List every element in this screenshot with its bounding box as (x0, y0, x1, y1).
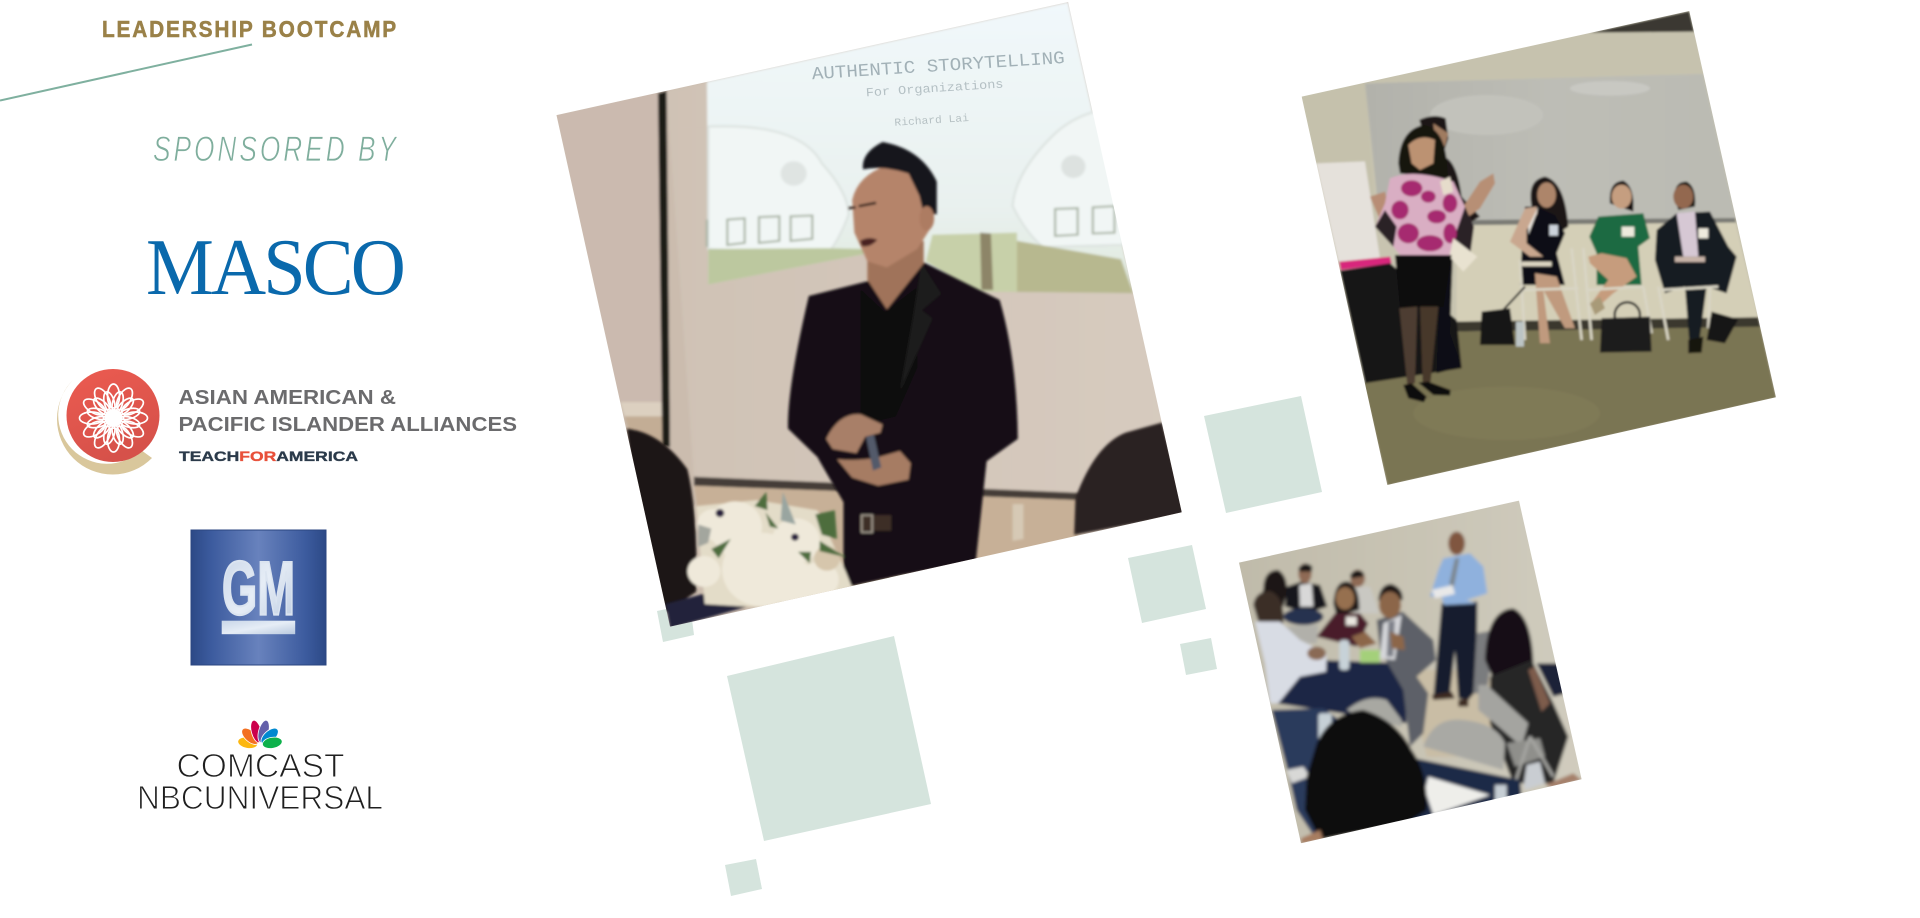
chair back front (1423, 720, 1505, 770)
logo text line 2: PACIFIC ISLANDER ALLIANCES (178, 414, 517, 436)
photo scene: room and screen (556, 2, 1182, 626)
GM letters: GM (222, 546, 295, 632)
seated woman in green (1588, 181, 1650, 315)
heading: sponsored by: SPONSORED BY (153, 130, 399, 169)
central table (1277, 660, 1407, 723)
chairs and bags (1520, 248, 1718, 340)
seated woman in black (1510, 177, 1575, 343)
projected slide subtitle: For Organizations (865, 77, 1004, 100)
standing man in blue shirt (1430, 532, 1487, 707)
icon: peacock (237, 719, 283, 750)
bouquet of white flowers (687, 492, 852, 608)
bottles and papers (1318, 713, 1332, 740)
background seated people (1257, 563, 1379, 625)
curly hair in foreground (1305, 710, 1427, 840)
accent line (0, 44, 252, 100)
icon: red circle (66, 369, 160, 462)
decorative green squares (657, 396, 1322, 896)
white chair back center (1347, 698, 1402, 727)
projected slide title: AUTHENTIC STORYTELLING (811, 48, 1065, 85)
photo scene: round tables (1239, 500, 1582, 844)
wordmark: Comcast: COMCAST (176, 747, 344, 784)
woman in maroon (1317, 582, 1368, 647)
man in grey suit (1352, 584, 1436, 747)
photo scene: panel discussion (1302, 11, 1776, 485)
panel: photo of speaker and seated panel (1302, 11, 1776, 485)
wordmark: NBCUniversal: NBCUNIVERSAL (137, 779, 383, 816)
logo: GM (191, 530, 326, 665)
front tables (1272, 708, 1343, 840)
logo: Comcast NBCUniversal (137, 719, 383, 816)
photo subject: speaker (627, 142, 1186, 629)
GM underline bar (222, 621, 295, 634)
seated man in suit (1655, 182, 1737, 353)
panel: photo of roundtable discussion (1239, 500, 1582, 844)
icon: lotus flower (80, 384, 148, 452)
icon: tan arc (57, 380, 152, 474)
GM blue tile (191, 530, 326, 665)
woman seated, right (1485, 608, 1580, 783)
logo text: Teach For America: TEACH FOR AMERICA (179, 448, 358, 464)
panel: main photo of speaker (556, 2, 1182, 626)
man in white shirt (1253, 591, 1327, 703)
logo text line 1: ASIAN AMERICAN & (178, 387, 396, 409)
logo: Masco: MASCO (146, 224, 403, 312)
logo: Asian American and Pacific Islander Alliances (57, 369, 517, 474)
projected slide presenter name: Richard Lai (894, 113, 970, 130)
chair backs (1478, 685, 1553, 783)
title: leadership bootcamp: LEADERSHIP BOOTCAMP (102, 16, 398, 42)
